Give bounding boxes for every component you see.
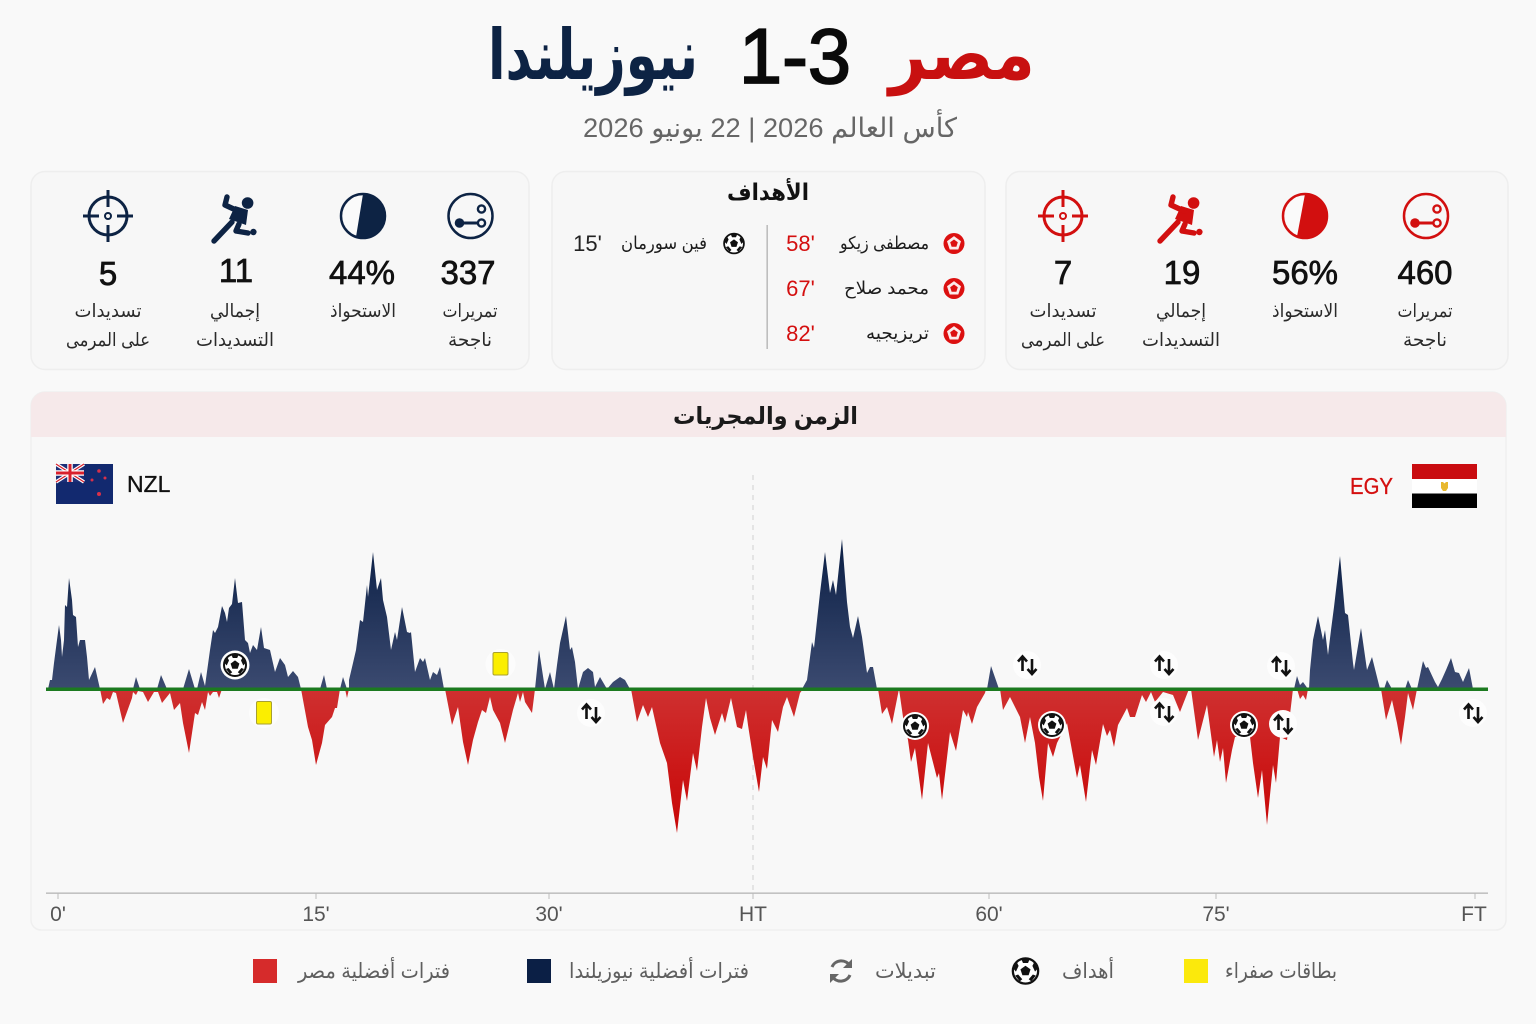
goal: Salah 67: محمد صلاح bbox=[844, 278, 929, 299]
goal: Zico 58: مصطفى زيكو bbox=[839, 233, 929, 253]
stat: completed passes bbox=[1397, 254, 1453, 350]
chart baseline bbox=[46, 688, 1488, 691]
icon: possession bbox=[1283, 194, 1327, 238]
time axis: 15' bbox=[302, 903, 330, 926]
score: 1-3 bbox=[739, 12, 851, 100]
goal: Salah 67 bbox=[786, 276, 964, 301]
time axis bbox=[46, 892, 1488, 926]
stat: total shots: 11 bbox=[219, 252, 253, 289]
time axis: FT bbox=[1461, 903, 1487, 926]
stat: possession bbox=[1272, 254, 1338, 322]
marker: substitution 6 bbox=[1269, 710, 1297, 738]
stat: possession: 44% bbox=[329, 254, 395, 291]
legend: Egypt periods bbox=[253, 957, 450, 983]
time axis: 0' bbox=[50, 903, 66, 926]
stat: completed passes: ناجحة bbox=[1403, 329, 1447, 350]
team code: EGY: EGY bbox=[1350, 473, 1393, 499]
legend: goals: أهداف bbox=[1062, 957, 1114, 983]
flag: Egypt bbox=[1412, 464, 1477, 508]
timeline heading: الزمن والمجريات bbox=[673, 403, 858, 430]
icon: shots on target bbox=[83, 190, 133, 242]
stat: shots on target: 7 bbox=[1054, 254, 1072, 291]
stat: completed passes: 337 bbox=[440, 254, 496, 291]
stat: completed passes bbox=[440, 254, 498, 350]
stat: completed passes: 460 bbox=[1397, 254, 1453, 291]
marker: Egypt goal 3 bbox=[1230, 711, 1258, 739]
panel: New Zealand stats bbox=[31, 172, 529, 370]
icon: shots on target bbox=[1038, 190, 1088, 242]
marker: New Zealand goal bbox=[220, 650, 250, 680]
legend: New Zealand periods bbox=[527, 957, 749, 983]
chart: Egypt dominance areas bbox=[100, 689, 1417, 833]
marker: yellow card 2 bbox=[486, 649, 516, 679]
home team name: مصر bbox=[886, 15, 1035, 97]
stat: total shots: التسديدات bbox=[1142, 329, 1220, 350]
time axis: 60' bbox=[975, 903, 1003, 926]
stat: total shots bbox=[196, 252, 274, 350]
goals heading: الأهداف bbox=[727, 177, 809, 205]
legend: substitutions: تبديلات bbox=[875, 960, 936, 983]
stat: possession: الاستحواذ bbox=[330, 300, 396, 322]
legend: goals bbox=[1013, 957, 1114, 984]
stat: completed passes: تمريرات bbox=[1398, 300, 1452, 322]
away team name: نيوزيلندا bbox=[488, 16, 698, 96]
goal: New Zealand 15: فين سورمان bbox=[621, 233, 707, 253]
stat: shots on target: على المرمى bbox=[66, 329, 150, 351]
stat: total shots: 19 bbox=[1164, 254, 1200, 291]
goal: Trezeguet 82: تريزيجيه bbox=[866, 323, 929, 343]
panel: Egypt stats bbox=[1006, 172, 1508, 370]
stat: shots on target: على المرمى bbox=[1021, 329, 1105, 351]
marker: substitution 1 bbox=[577, 699, 605, 727]
goal: Zico 58: 58' bbox=[786, 231, 815, 256]
stat: shots on target bbox=[1021, 254, 1105, 351]
marker: substitution 5 bbox=[1267, 652, 1295, 680]
timeline header band bbox=[31, 392, 1506, 437]
team code: NZL: NZL bbox=[127, 471, 171, 497]
chart: New Zealand dominance areas bbox=[48, 539, 1473, 689]
marker: Egypt goal 2 bbox=[1038, 711, 1066, 739]
goal: Salah 67: 67' bbox=[786, 276, 815, 301]
stat: total shots: إجمالي bbox=[1156, 300, 1206, 322]
stat: total shots: إجمالي bbox=[210, 300, 260, 322]
subtitle: competition and date: كأس العالم 2026 | 22 يونيو 2026 bbox=[583, 108, 957, 144]
panel: timeline bbox=[31, 392, 1506, 930]
stat: completed passes: ناجحة bbox=[448, 329, 492, 350]
icon: passes bbox=[448, 194, 492, 238]
panel: goals bbox=[552, 172, 985, 370]
stat: completed passes: تمريرات bbox=[442, 300, 498, 322]
legend: Egypt periods: فترات أفضلية مصر bbox=[297, 957, 450, 983]
legend: New Zealand periods: فترات أفضلية نيوزيلندا bbox=[569, 957, 749, 983]
legend: substitutions bbox=[830, 959, 936, 983]
stat: shots on target bbox=[66, 255, 150, 351]
marker: substitution 4 bbox=[1150, 698, 1178, 726]
goal: Trezeguet 82 bbox=[786, 321, 964, 346]
flag: New Zealand bbox=[56, 464, 113, 504]
stat: possession: 56% bbox=[1272, 254, 1338, 291]
stat: shots on target: تسديدات bbox=[74, 300, 142, 321]
icon: total shots bbox=[214, 197, 257, 241]
icon: passes bbox=[1404, 194, 1448, 238]
marker: substitution 2 bbox=[1013, 651, 1041, 679]
stat: shots on target: 5 bbox=[99, 255, 117, 292]
marker: substitution 3 bbox=[1150, 651, 1178, 679]
goal: Trezeguet 82: 82' bbox=[786, 321, 815, 346]
icon: total shots bbox=[1160, 197, 1203, 241]
legend: yellow cards: بطاقات صفراء bbox=[1225, 960, 1337, 983]
halftime dashed line bbox=[752, 475, 754, 890]
stat: shots on target: تسديدات bbox=[1030, 300, 1096, 321]
legend: yellow cards bbox=[1184, 959, 1337, 983]
marker: Egypt goal 1 bbox=[901, 712, 929, 740]
title: score line bbox=[488, 12, 1035, 100]
time axis: 75' bbox=[1202, 903, 1230, 926]
time axis: 30' bbox=[535, 903, 563, 926]
divider bbox=[766, 225, 768, 349]
stat: total shots bbox=[1142, 254, 1220, 350]
goal: New Zealand 15: 15' bbox=[573, 231, 602, 256]
icon: possession bbox=[341, 194, 385, 238]
time axis: HT bbox=[739, 903, 767, 926]
marker: yellow card 1 bbox=[249, 698, 279, 728]
stat: possession: الاستحواذ bbox=[1272, 300, 1338, 322]
legend bbox=[253, 957, 1337, 984]
goal: New Zealand 15 bbox=[573, 231, 744, 256]
marker: substitution 7 bbox=[1459, 699, 1487, 727]
stat: total shots: التسديدات bbox=[196, 329, 274, 350]
stat: possession bbox=[329, 254, 396, 322]
goal: Zico 58 bbox=[786, 231, 964, 256]
